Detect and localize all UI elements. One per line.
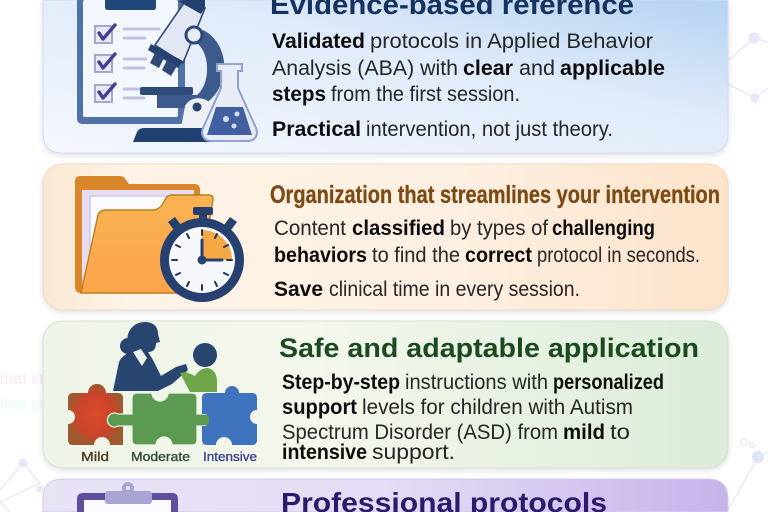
text block: classified	[352, 217, 445, 240]
text block: and	[519, 57, 555, 80]
text block: personalized	[553, 371, 664, 394]
text block: Save	[274, 278, 323, 301]
text block: support	[282, 396, 357, 419]
text block	[282, 371, 664, 464]
icon: therapist, child and puzzle pieces: Mild	[81, 449, 109, 464]
heading: Safe and adaptable application	[279, 333, 699, 363]
text block: clear	[463, 57, 513, 80]
panel 3 background	[43, 321, 728, 468]
text block: Spectrum Disorder (ASD) from	[282, 421, 558, 444]
icon: therapist, child and puzzle pieces: Intensive	[203, 449, 257, 464]
panel 2 background	[43, 164, 728, 310]
panel: professional protocols	[43, 479, 728, 512]
text block: protocol in seconds.	[537, 244, 700, 267]
text block: instructions with	[405, 371, 548, 394]
text block: Validated	[272, 30, 365, 53]
icon: clipboard	[77, 482, 178, 512]
text block: to	[610, 421, 630, 444]
panel 4 background	[43, 479, 728, 512]
text block: Analysis (ABA) with	[272, 57, 458, 80]
panel 1 background	[43, 0, 728, 153]
text block	[274, 217, 700, 301]
text block: levels for children with Autism	[362, 396, 633, 419]
panel: evidence-based reference	[43, 0, 728, 153]
text block: steps	[272, 83, 326, 106]
text block: intervention, not just theory.	[366, 118, 613, 141]
text block: support.	[372, 441, 455, 464]
text block: Practical	[272, 118, 361, 141]
text block: challenging	[552, 217, 655, 240]
icon: folder and stopwatch	[75, 176, 244, 302]
text block	[272, 30, 665, 141]
text block: behaviors	[274, 244, 367, 267]
icon: clipboard and microscope with flask	[77, 0, 257, 142]
text block: mild	[563, 421, 605, 444]
icon: therapist, child and puzzle pieces	[68, 322, 257, 464]
faint ghost text artefact: that streamlines your intervention	[0, 396, 236, 413]
icon: therapist, child and puzzle pieces: Moderate	[131, 449, 190, 464]
panel: organization	[43, 164, 728, 310]
text block: from the first session.	[331, 83, 520, 106]
text block: to find the	[372, 244, 460, 267]
text block: applicable	[560, 57, 665, 80]
text block: clinical time in every session.	[329, 278, 580, 301]
panel: safe and adaptable application	[43, 321, 728, 468]
text block: Content	[274, 217, 346, 240]
text block: protocols in Applied Behavior	[370, 30, 653, 53]
text block: correct	[465, 244, 532, 267]
text block: Step-by-step	[282, 371, 400, 394]
faint ghost text artefact: that streamlines your intervention	[0, 371, 236, 388]
text block: intensive	[282, 441, 367, 464]
text block: by types of	[450, 217, 548, 240]
faint ghost text artefact	[0, 371, 236, 413]
